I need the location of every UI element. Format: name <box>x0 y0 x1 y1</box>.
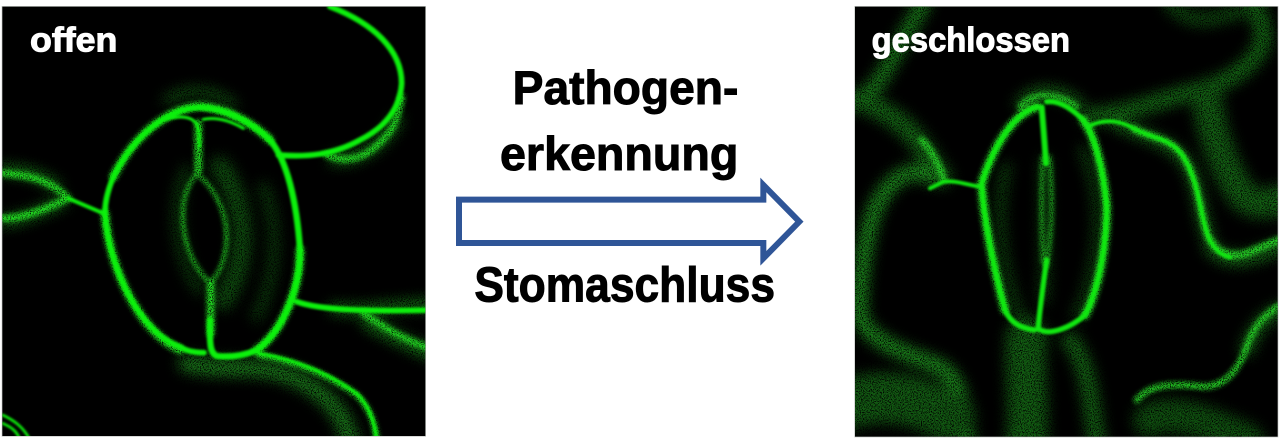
arrow: open to closed <box>459 185 799 258</box>
label: offen: offen <box>30 22 117 60</box>
panel: offen (open stoma micrograph) <box>2 6 430 440</box>
heading: Pathogen-: Pathogen- <box>513 62 738 115</box>
haze around the open stoma <box>3 92 430 440</box>
grainy cell-wall lines <box>922 95 1280 400</box>
label: geschlossen: geschlossen <box>872 22 1070 60</box>
diffuse epidermal cell walls <box>850 3 1280 440</box>
bright cell-wall lines <box>3 7 430 440</box>
panel: geschlossen (closed stoma micrograph) <box>850 3 1280 440</box>
heading: erkennung: erkennung <box>500 128 738 181</box>
heading: Stomaschluss: Stomaschluss <box>474 258 775 313</box>
bright guard-cell outlines <box>930 101 1230 332</box>
grainy cell-wall lines <box>3 97 430 440</box>
